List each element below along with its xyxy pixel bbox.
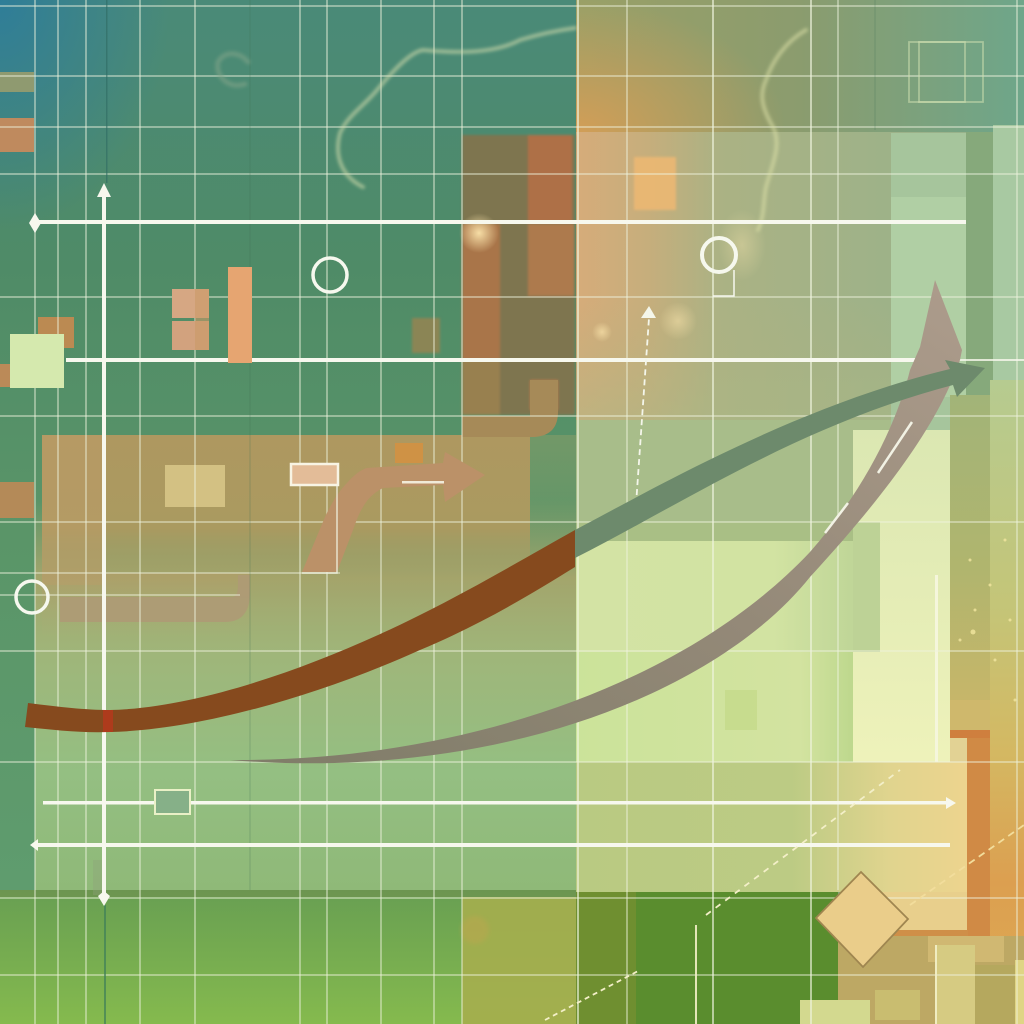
dotted trend lines bottom right: [545, 770, 1024, 1024]
chart axis: main horizontal rules: [29, 213, 1024, 851]
marker: circle top right with leader: [702, 238, 736, 296]
small bars: [172, 267, 252, 363]
icon: outlined squares top right: [909, 42, 983, 102]
panel: right side strips: [950, 380, 1024, 1024]
panel: large light green blocks: [576, 430, 968, 936]
arrow: small tan bent arrow: [302, 452, 485, 573]
panel: tan rounded L-shaped band: [42, 380, 576, 643]
marker: pale green square: [10, 334, 64, 388]
glow points: [459, 209, 766, 342]
chart axis: vertical arrow: [93, 0, 111, 1024]
marker: tan diamond: [816, 872, 908, 967]
marker: circle left: [16, 581, 48, 613]
arrow: lower grey curve with tall head: [230, 280, 962, 763]
marker: tan tag box: [291, 464, 338, 485]
background panel: upper right gradient: [576, 0, 1024, 133]
panel: dark green lower block: [576, 892, 1024, 1024]
sparkles right edge: [958, 538, 1016, 702]
arrow: dashed upward arrow: [636, 306, 656, 505]
background panel: left cool gradient: [0, 0, 577, 1024]
panel: upper right sage block: [576, 125, 1024, 525]
panel: left edge orange blocks: [0, 72, 440, 518]
arrow: main rising curve: [25, 360, 985, 732]
panel: warm lower right: [890, 700, 990, 938]
faint swirl lines top: [218, 28, 806, 230]
panel: orange column top centre: [462, 135, 575, 415]
marker: circle top centre: [313, 258, 347, 292]
marker: green slider box: [155, 790, 190, 814]
